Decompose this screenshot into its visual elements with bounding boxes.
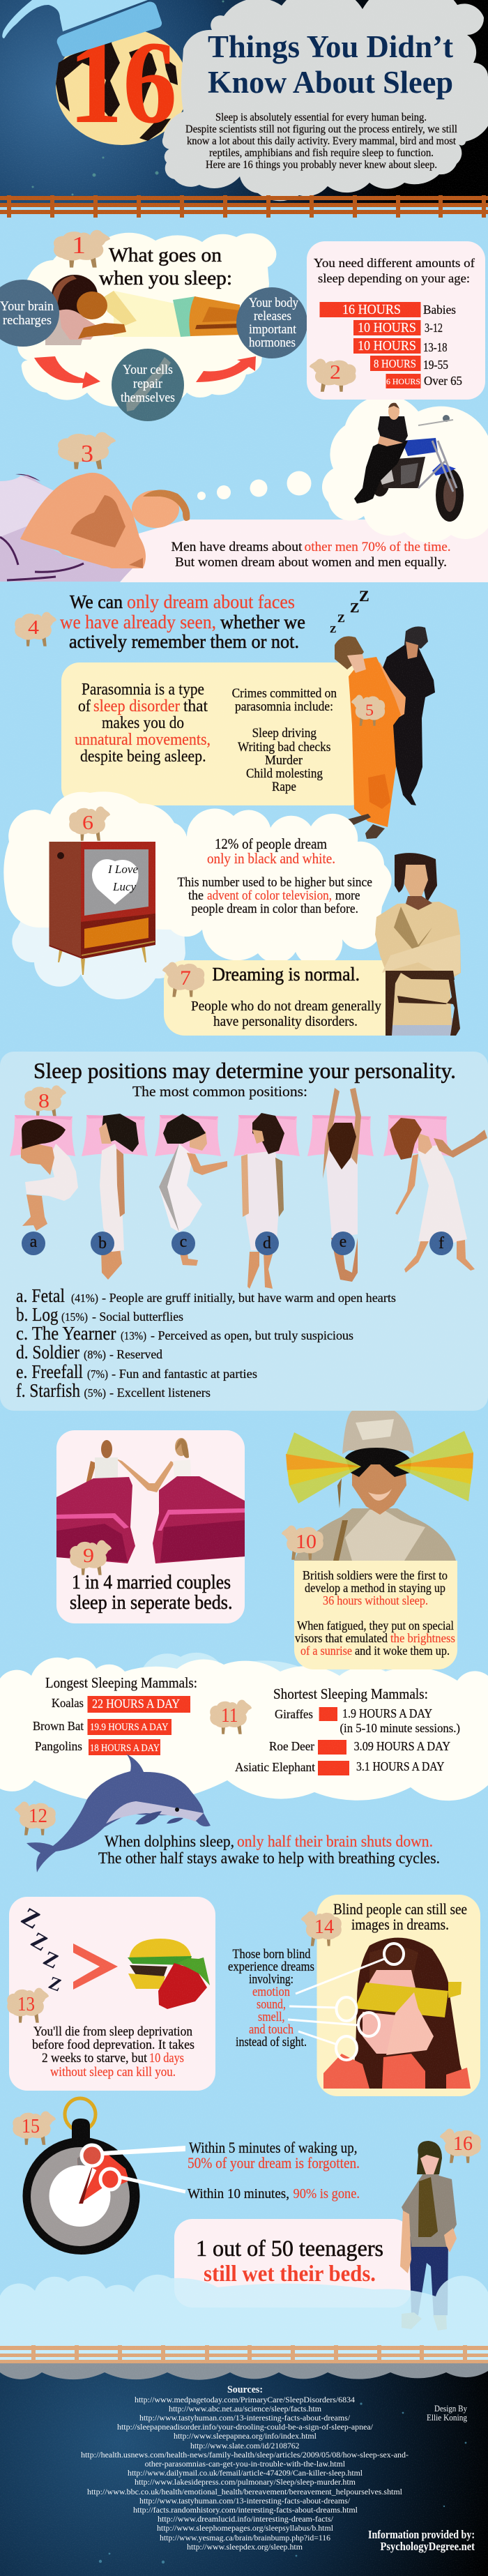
pale cloud behind mammals	[139, 1653, 432, 1688]
text: blind dreams: emotion	[252, 1985, 290, 1999]
lower pale cloud	[12, 907, 185, 999]
sources	[81, 2384, 409, 2552]
sheep 7	[162, 962, 204, 997]
bar: 19-55: 8 HOURS	[374, 357, 416, 370]
sheep 12	[15, 1802, 56, 1835]
sheep 9: 9	[83, 1545, 94, 1567]
list of positions	[16, 1285, 396, 1401]
design credit: Ellie Koning	[427, 2413, 468, 2423]
text: separate beds: sleep in seperate beds.	[70, 1592, 233, 1614]
list of positions: - People are gruff initially, but have warm and open hearts	[102, 1291, 396, 1305]
circle: your brain recharges: recharges	[3, 313, 52, 328]
bar: 19-55	[370, 356, 448, 372]
panel: british soldiers	[294, 1561, 457, 1669]
thought bubble cloud	[322, 395, 488, 543]
strawberry	[158, 1957, 210, 2009]
sheep 12: 12	[29, 1805, 47, 1827]
visor beams	[286, 1431, 473, 1503]
text: black and white dreams: This number used to be higher but since	[177, 876, 372, 890]
text: separate beds: 1 in 4 married couples	[72, 1572, 231, 1593]
circle: your body releases important hormones: hormones	[249, 336, 296, 350]
burger	[128, 1939, 192, 1989]
sources: http://health.usnews.com/health-news/family-health/sleep/articles/2009/05/08/how-sleep-sex-and-	[81, 2450, 409, 2460]
bar: pangolins: 18 HOURS A DAY	[90, 1743, 160, 1754]
sheep 13: 13	[17, 1993, 35, 2015]
label circles a-f: b	[98, 1234, 107, 1252]
panel: teenagers	[174, 2219, 411, 2308]
list of positions: (7%)	[87, 1367, 108, 1381]
cloud: mammals	[0, 1658, 488, 1804]
text: dreaming is normal	[191, 964, 381, 1029]
cloud: black and white dreams	[3, 791, 392, 967]
text: crimes list: parasomnia include:	[235, 700, 333, 714]
intro paragraph: know a lot about this daily activity. Every mammal, bird and most	[187, 135, 457, 147]
couple in beds	[56, 1438, 245, 1563]
text: blind dreams: experience dreams	[228, 1960, 314, 1974]
bar: koalas	[52, 1696, 190, 1713]
text: parasomnia definition	[75, 681, 211, 766]
text: crimes list	[232, 687, 337, 794]
heading: what goes on	[99, 244, 232, 289]
text: sleep deprivation: You'll die from sleep deprivation	[33, 2025, 192, 2039]
sheep 2: 2	[330, 361, 341, 384]
bar: giraffes	[275, 1706, 460, 1736]
figure e: freefall	[323, 1088, 361, 1282]
sources: Sources:	[227, 2384, 263, 2395]
information credit	[368, 2528, 475, 2553]
moon with 16	[56, 17, 188, 148]
panel: british soldiers: 36 hours without sleep.	[323, 1593, 428, 1607]
heading: faces: only dream about faces	[127, 591, 295, 612]
bar: giraffes: 1.9 HOURS A DAY	[342, 1706, 432, 1720]
circle: your cells repair themselves	[112, 349, 184, 421]
panel: british soldiers: British soldiers were the first to	[303, 1568, 448, 1582]
list of positions: f. Starfish	[16, 1380, 80, 1401]
text: parasomnia definition: sleep disorder	[93, 697, 180, 715]
bar: over 65: Over 65	[424, 374, 462, 388]
text: blind dreams: sound,	[257, 1998, 286, 2012]
list of positions: - Reserved	[109, 1347, 162, 1361]
sources: http://www.yesmag.ca/brain/brainbump.php?id=116	[160, 2533, 330, 2543]
heading: faces: We can	[70, 591, 123, 612]
thought bubbles	[197, 471, 311, 500]
heading: what goes on: What goes on	[109, 244, 222, 266]
text: blind dreams: instead of sight.	[236, 2036, 307, 2050]
panel: british soldiers: and it woke them up.	[355, 1644, 450, 1658]
sheep 5	[351, 695, 385, 726]
intro paragraph: Here are 16 things you probably never knew about sleep.	[206, 159, 437, 171]
text: separate beds	[70, 1572, 233, 1614]
television	[49, 842, 155, 975]
sheep 15	[13, 2112, 56, 2145]
text: men's dreams: Men have dreams about	[171, 540, 303, 554]
circle: your brain recharges	[0, 280, 59, 347]
figure d: soldier	[241, 1113, 284, 1289]
nightcap	[2, 0, 162, 56]
night sky footer background	[0, 2361, 488, 2576]
text: parasomnia definition: of	[78, 697, 91, 715]
panel: british soldiers: visors that emulated	[295, 1631, 388, 1645]
intro paragraph	[185, 112, 457, 171]
bar: brown bat	[33, 1719, 171, 1735]
text: dolphins: When dolphins sleep,	[105, 1833, 234, 1850]
list of positions: - Excellent listeners	[109, 1386, 211, 1400]
footer stars	[99, 2402, 466, 2563]
bar: over 65: 6 HOURS	[386, 377, 420, 386]
sources: http://www.lakesidepress.com/pulmonary/Sleep/sleep-murder.htm	[135, 2477, 356, 2487]
text: dream forgetting: 50% of your dream is forgotten.	[188, 2154, 360, 2172]
circle: your body releases important hormones: releases	[254, 310, 291, 324]
panel: separate beds	[56, 1430, 245, 1623]
sheep 4	[15, 612, 56, 646]
list of positions: e. Freefall	[16, 1361, 83, 1382]
label circles a-f	[22, 1232, 453, 1255]
sources: http://www.dreamlucid.info/interesting-dream-facts/	[158, 2514, 334, 2524]
text: black and white dreams	[177, 835, 372, 916]
panel: dreaming is normal	[164, 960, 397, 1036]
information credit: PsychologyDegree.net	[381, 2540, 475, 2553]
bottom fence	[0, 2345, 488, 2367]
panel: sleep by age	[307, 241, 485, 400]
text: dreaming is normal: have personality disorders.	[213, 1015, 358, 1029]
callout rings and lines	[288, 1944, 404, 2060]
bar: giraffes: (in 5-10 minute sessions.)	[340, 1721, 460, 1736]
sheep 8	[24, 1085, 66, 1117]
circle: your body releases important hormones: Your body	[249, 296, 299, 310]
night sky header background	[0, 0, 488, 206]
sources: http://www.sleepdex.org/sleep.htm	[187, 2542, 303, 2552]
bar: asiatic elephant: Asiatic Elephant	[235, 1760, 315, 1774]
sheep 11	[210, 1700, 252, 1734]
list of positions: a. Fetal	[16, 1285, 65, 1306]
callout: 10 minutes	[100, 2169, 185, 2192]
sources: http://www.bbc.co.uk/health/emotional_health/bereavement/bereavement_helpourselves.shtml	[87, 2487, 403, 2497]
white band: men's dreams	[120, 520, 488, 582]
sheep 9	[70, 1540, 112, 1575]
grey cloud bottoms	[0, 2363, 488, 2380]
text: sleep deprivation	[32, 2025, 195, 2079]
man on motorcycle	[354, 403, 464, 522]
bar: pangolins	[35, 1739, 160, 1755]
text: sleep deprivation: 10 days	[149, 2052, 184, 2066]
list of positions: d. Soldier	[16, 1342, 79, 1363]
list of positions: (15%)	[61, 1310, 88, 1324]
text: parasomnia definition: despite being asleep.	[80, 748, 206, 766]
bar: 13-18: 10 HOURS	[358, 338, 416, 354]
sources: http://www.tastyhuman.com/13-interesting-facts-about-dreams/	[139, 2496, 351, 2506]
bar: 13-18	[353, 338, 448, 354]
arrow: brain to cells	[34, 356, 100, 388]
sheep 14	[301, 1911, 342, 1946]
heading: faces: whether we	[220, 612, 305, 632]
sources: http://sleepapneadisorder.info/your-drooling-could-be-a-sign-of-sleep-apnea/	[117, 2422, 374, 2432]
big number 16: 16	[68, 17, 177, 148]
text: dream forgetting: Within 5 minutes of waking up,	[189, 2139, 357, 2156]
text: crimes list: Murder	[265, 754, 303, 768]
text: crimes list: Writing bad checks	[238, 741, 330, 755]
subheading: The most common positions:	[132, 1083, 307, 1100]
sheep 6: 6	[82, 812, 93, 834]
text: crimes list: Crimes committed on	[232, 687, 337, 701]
text: black and white dreams: only in black and white.	[207, 850, 335, 867]
circle: your cells repair themselves: repair	[133, 377, 163, 391]
title cloud	[162, 0, 488, 201]
design credit: Design By	[434, 2404, 468, 2414]
text: blind dreams	[228, 1948, 314, 2050]
soldier with light visors	[294, 1411, 456, 1561]
z letters: Z	[26, 1927, 52, 1956]
label circles a-f: d	[263, 1234, 271, 1252]
bar: asiatic elephant	[235, 1759, 445, 1775]
greater than sign	[73, 1944, 118, 1990]
circle: your cells repair themselves: themselves	[121, 391, 175, 405]
text: dolphins: only half their brain shuts down.	[237, 1833, 433, 1850]
z z z z: Z	[350, 600, 359, 616]
z z z z: Z	[330, 625, 336, 635]
intro paragraph: Despite scientists still not figuring out the process entirely, we still	[185, 123, 457, 135]
sources: http://www.medpagetoday.com/PrimaryCare/SleepDisorders/6834	[135, 2395, 355, 2404]
text: sleep deprivation: before food deprevation. It takes	[32, 2038, 195, 2052]
panel: sleep positions	[0, 1052, 488, 1411]
label circles a-f: c	[180, 1233, 187, 1251]
text: blind dreams: Those born blind	[233, 1948, 311, 1962]
top fence	[0, 195, 488, 218]
chart: longest sleeping mammals: Longest Sleeping Mammals:	[45, 1674, 197, 1691]
z letters: Z	[40, 1946, 62, 1973]
panel: teenagers: 1 out of 50 teenagers	[196, 2236, 383, 2261]
circle: your body releases important hormones: important	[249, 323, 297, 337]
circle: your body releases important hormones	[236, 287, 307, 358]
list of positions: b. Log	[16, 1304, 59, 1325]
panel: sleep by age: sleep depending on your age:	[318, 271, 470, 285]
bar: babies: Babies	[423, 303, 456, 317]
bar: roe deer	[269, 1739, 450, 1755]
figure c: yearner	[159, 1114, 227, 1266]
sheep 16: 16	[453, 2132, 473, 2155]
sources: http://www.abc.net.au/science/sleep/facts.htm	[169, 2404, 322, 2414]
z letters	[17, 1902, 64, 1996]
panel: british soldiers: develop a method in staying up	[305, 1581, 445, 1595]
intro paragraph: reptiles, amphibians and fish require sleep to function.	[209, 147, 434, 159]
tv logo text: Lucy	[112, 880, 137, 893]
blindfolded girl	[323, 1938, 471, 2089]
chart: longest sleeping mammals	[33, 1674, 197, 1755]
sources: http://www.sleepapnea.org/info/index.html	[174, 2431, 317, 2441]
sheep 6	[69, 807, 110, 841]
figure b: log	[99, 1114, 139, 1280]
title: Things You Didn’t	[208, 29, 453, 64]
figure a: fetal	[21, 1119, 78, 1231]
bar: roe deer: Roe Deer	[269, 1739, 314, 1753]
bar: brown bat: 19.9 HOURS A DAY	[90, 1722, 169, 1733]
sheep 14: 14	[314, 1916, 334, 1938]
text: dreaming is normal: People who do not dream generally	[191, 999, 381, 1014]
text: blind dreams: involving:	[249, 1973, 293, 1987]
text: dolphins	[98, 1833, 440, 1867]
heading: faces	[60, 591, 305, 652]
pillows	[10, 1115, 450, 1156]
text: crimes list: Rape	[272, 780, 296, 794]
text: black and white dreams: 12% of people dream	[215, 835, 327, 852]
text: dream forgetting: 90% is gone.	[293, 2186, 360, 2202]
list of positions: - Fun and fantastic at parties	[112, 1367, 257, 1381]
panel: blind people	[317, 1895, 480, 2096]
text: sleep deprivation: 2 weeks to starve, but	[42, 2052, 148, 2066]
heading: faces: we have already seen,	[60, 612, 216, 632]
sheep 3: 3	[81, 440, 93, 467]
list of positions: - Social butterflies	[92, 1310, 183, 1324]
title	[208, 29, 453, 100]
sheep 1: 1	[72, 232, 86, 259]
text: blind dreams: and touch	[249, 2023, 293, 2037]
tv logo text: I Love	[107, 863, 138, 876]
z z z z: Z	[337, 613, 345, 625]
teenager	[400, 2141, 457, 2331]
sheep 1	[54, 230, 110, 268]
bar: brown bat: Brown Bat	[33, 1719, 84, 1733]
sleeping man	[0, 473, 190, 582]
list of positions: (13%)	[121, 1329, 146, 1342]
sheep 10	[282, 1526, 323, 1560]
sheep 8: 8	[38, 1091, 49, 1112]
text: parasomnia definition: unnatural movements,	[75, 731, 211, 749]
label circles a-f: f	[439, 1234, 444, 1252]
text: blind dreams: smell,	[258, 2010, 284, 2024]
text: dream forgetting	[188, 2139, 360, 2202]
bar: roe deer: 3.09 HOURS A DAY	[354, 1739, 450, 1753]
bar: 13-18: 13-18	[423, 340, 448, 354]
circle: your cells repair themselves: Your cells	[123, 363, 173, 377]
bar: 19-55: 19-55	[423, 358, 448, 372]
text: dreaming is normal: Dreaming is normal.	[212, 964, 360, 985]
panel: blind people: images in dreams.	[351, 1916, 449, 1933]
callout: 5 minutes	[82, 2145, 185, 2166]
prisoner and officer	[335, 626, 435, 839]
text: black and white dreams: the	[188, 889, 204, 903]
panel: british soldiers: the brightness	[390, 1631, 455, 1645]
text: parasomnia definition: makes you do	[102, 714, 184, 732]
sources: http://www.tastyhuman.com/13-interesting-facts-about-dreams/	[139, 2413, 351, 2423]
text: crimes list: Sleep driving	[252, 727, 317, 741]
panel: british soldiers: When fatigued, they put on special	[297, 1619, 454, 1632]
cloud: what goes on	[15, 233, 276, 407]
bar: 3-12: 3-12	[425, 321, 443, 335]
panel: sleep by age: You need different amounts of	[314, 256, 475, 270]
list of positions: (41%)	[71, 1291, 98, 1305]
bar: koalas: 22 HOURS A DAY	[92, 1697, 180, 1711]
heading: faces: actively remember them or not.	[69, 631, 299, 652]
list of positions: c. The Yearner	[16, 1323, 116, 1344]
label circles a-f: a	[30, 1233, 38, 1251]
sleeping woman	[45, 275, 240, 345]
sheep 4: 4	[28, 617, 39, 639]
z z z z: Z	[359, 587, 369, 605]
chart: shortest sleeping mammals: Shortest Sleeping Mammals:	[273, 1685, 428, 1702]
sheep 11: 11	[221, 1704, 238, 1727]
text: men's dreams: other men 70% of the time.	[305, 540, 451, 554]
bar: pangolins: Pangolins	[35, 1739, 82, 1753]
text: parasomnia definition: Parasomnia is a type	[82, 681, 204, 699]
text: black and white dreams: advent of color television,	[207, 889, 332, 903]
sources: http://www.slate.com/id/2108762	[190, 2441, 300, 2450]
chart: shortest sleeping mammals	[235, 1685, 460, 1775]
text: sleep deprivation: without sleep can kill you.	[50, 2066, 176, 2079]
sheep 15: 15	[22, 2115, 40, 2137]
sources: http://www.dailymail.co.uk/femail/article-474209/Can-killer-sleep.html	[128, 2468, 363, 2478]
panel: teenagers: still wet their beds.	[204, 2261, 376, 2287]
sheep 2	[310, 358, 356, 392]
label circles a-f: e	[340, 1233, 346, 1251]
panel: parasomnia	[61, 662, 368, 805]
list of positions: - Perceived as open, but truly suspicious	[151, 1328, 353, 1342]
text: dream forgetting: Within 10 minutes,	[188, 2186, 289, 2202]
list of positions: (5%)	[84, 1386, 106, 1400]
list of positions: (8%)	[84, 1348, 106, 1361]
z z z z	[330, 587, 369, 635]
figure f: starfish	[390, 1118, 487, 1273]
text: dolphins: The other half stays awake to help with breathing cycles.	[98, 1849, 440, 1867]
sheep 10: 10	[296, 1531, 317, 1553]
sheep 7: 7	[180, 967, 191, 990]
text: black and white dreams: more	[335, 889, 360, 903]
bar: babies	[319, 302, 456, 317]
sources: http://facts.randomhistory.com/interesting-facts-about-dreams.html	[133, 2505, 358, 2515]
bar: babies: 16 HOURS	[342, 302, 401, 317]
text: parasomnia definition: that	[183, 697, 208, 715]
bar: over 65	[386, 374, 462, 388]
sources: http://www.sleephomepages.org/sleepsyllabus/b.html	[157, 2523, 334, 2533]
bar: giraffes: Giraffes	[275, 1707, 313, 1721]
icon: wrench	[126, 357, 171, 411]
sheep 16	[440, 2129, 481, 2163]
design credit	[427, 2404, 468, 2423]
text: black and white dreams: people dream in color than before.	[191, 902, 358, 916]
tv logo text	[107, 863, 138, 893]
arrow: cells to body	[196, 356, 256, 382]
person in straitjacket	[375, 853, 461, 1036]
z letters: Z	[17, 1902, 45, 1934]
bar: asiatic elephant: 3.1 HOURS A DAY	[356, 1759, 445, 1773]
title: Know About Sleep	[208, 65, 453, 100]
bar: 3-12: 10 HOURS	[358, 320, 416, 335]
bar: koalas: Koalas	[52, 1696, 84, 1710]
text: men's dreams	[171, 540, 451, 570]
sheep 5: 5	[365, 702, 374, 719]
header stars	[32, 0, 224, 195]
bottom clouds	[0, 2275, 488, 2367]
heading: sleep positions: Sleep positions may determine your personality.	[33, 1058, 456, 1083]
circle: your brain recharges: Your brain	[0, 299, 54, 314]
intro paragraph: Sleep is absolutely essential for every human being.	[215, 112, 427, 123]
text: crimes list: Child molesting	[246, 767, 323, 781]
z letters: Z	[46, 1972, 64, 1996]
panel: sleep vs food	[7, 1897, 215, 2091]
sheep 3	[58, 432, 116, 469]
sheep 13	[7, 1988, 49, 2023]
sources: other-parasomnias-can-get-you-in-trouble-with-the-law.html	[145, 2459, 346, 2469]
heading: what goes on: when you sleep:	[99, 267, 232, 289]
text: men's dreams: But women dream about women and men equally.	[175, 555, 447, 570]
panel: british soldiers: of a sunrise	[300, 1644, 352, 1658]
panel: blind people: Blind people can still see	[333, 1900, 467, 1918]
dolphin	[26, 1754, 211, 1872]
stopwatch	[22, 2098, 185, 2255]
